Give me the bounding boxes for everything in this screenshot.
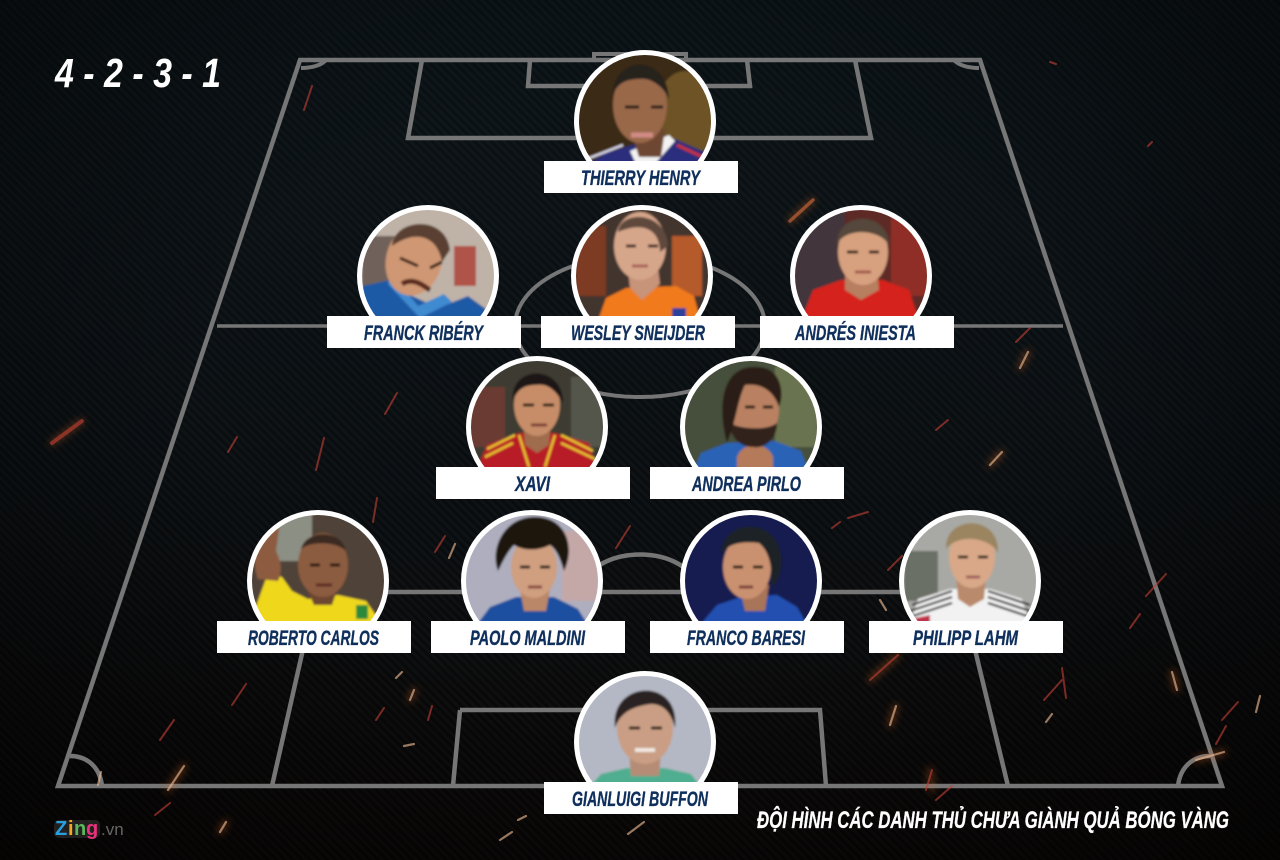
player: Roberto Carlos: [217, 510, 411, 653]
Zing.vn logo: i: [68, 818, 74, 840]
Zing.vn logo: [54, 818, 124, 840]
name label: Xavi: [436, 467, 630, 499]
name label: Lahm: [869, 621, 1063, 653]
name label: Maldini: [431, 621, 625, 653]
portrait: Baresi: [680, 510, 822, 621]
Zing.vn logo: .vn: [101, 820, 124, 839]
Zing.vn logo: g: [86, 818, 98, 840]
name label: Sneijder: [541, 316, 735, 348]
name label: Lahm: PHILIPP LAHM: [913, 627, 1018, 650]
name label: Maldini: PAOLO MALDINI: [470, 627, 586, 650]
football pitch lines: [58, 54, 1222, 786]
portrait: Iniesta: [790, 205, 932, 316]
player: Gianluigi Buffon: [544, 671, 738, 814]
player: Philipp Lahm: [869, 510, 1063, 653]
portrait: Buffon: [574, 671, 716, 782]
name label: Baresi: [650, 621, 844, 653]
portrait: Lahm: [899, 510, 1041, 621]
name label: Henry: [544, 161, 738, 193]
name label: Iniesta: [760, 316, 954, 348]
Zing.vn logo: Z: [55, 818, 67, 840]
portrait: Sneijder: [571, 205, 713, 316]
formation title: 4 - 2 - 3 - 1: [54, 50, 221, 96]
name label: Pirlo: ANDREA PIRLO: [691, 473, 801, 496]
portrait: Maldini: [461, 510, 603, 621]
name label: Ribéry: FRANCK RIBÉRY: [364, 322, 484, 345]
portrait: Ribéry: [357, 205, 499, 316]
name label: Carlos: [217, 621, 411, 653]
name label: Baresi: FRANCO BARESI: [687, 627, 806, 650]
name label: Xavi: XAVI: [514, 473, 551, 496]
name label: Ribéry: [327, 316, 521, 348]
name label: Iniesta: ANDRÉS INIESTA: [794, 322, 916, 345]
player: Wesley Sneijder: [541, 205, 735, 348]
Zing.vn logo: n: [74, 818, 86, 840]
player: Xavi: [436, 356, 630, 499]
name label: Pirlo: [650, 467, 844, 499]
portrait: Henry: [574, 50, 716, 161]
name label: Buffon: GIANLUIGI BUFFON: [572, 788, 709, 811]
player: Thierry Henry: [544, 50, 738, 193]
name label: Buffon: [544, 782, 738, 814]
player: Franck Ribéry: [327, 205, 521, 348]
portrait: Carlos: [247, 510, 389, 621]
portrait: Xavi: [466, 356, 608, 467]
player: Paolo Maldini: [431, 510, 625, 653]
player: Andrés Iniesta: [760, 205, 954, 348]
name label: Carlos: ROBERTO CARLOS: [248, 627, 379, 650]
name label: Henry: THIERRY HENRY: [581, 167, 701, 190]
name label: Sneijder: WESLEY SNEIJDER: [571, 322, 706, 345]
player: Andrea Pirlo: [650, 356, 844, 499]
portrait: Pirlo: [680, 356, 822, 467]
player: Franco Baresi: [650, 510, 844, 653]
